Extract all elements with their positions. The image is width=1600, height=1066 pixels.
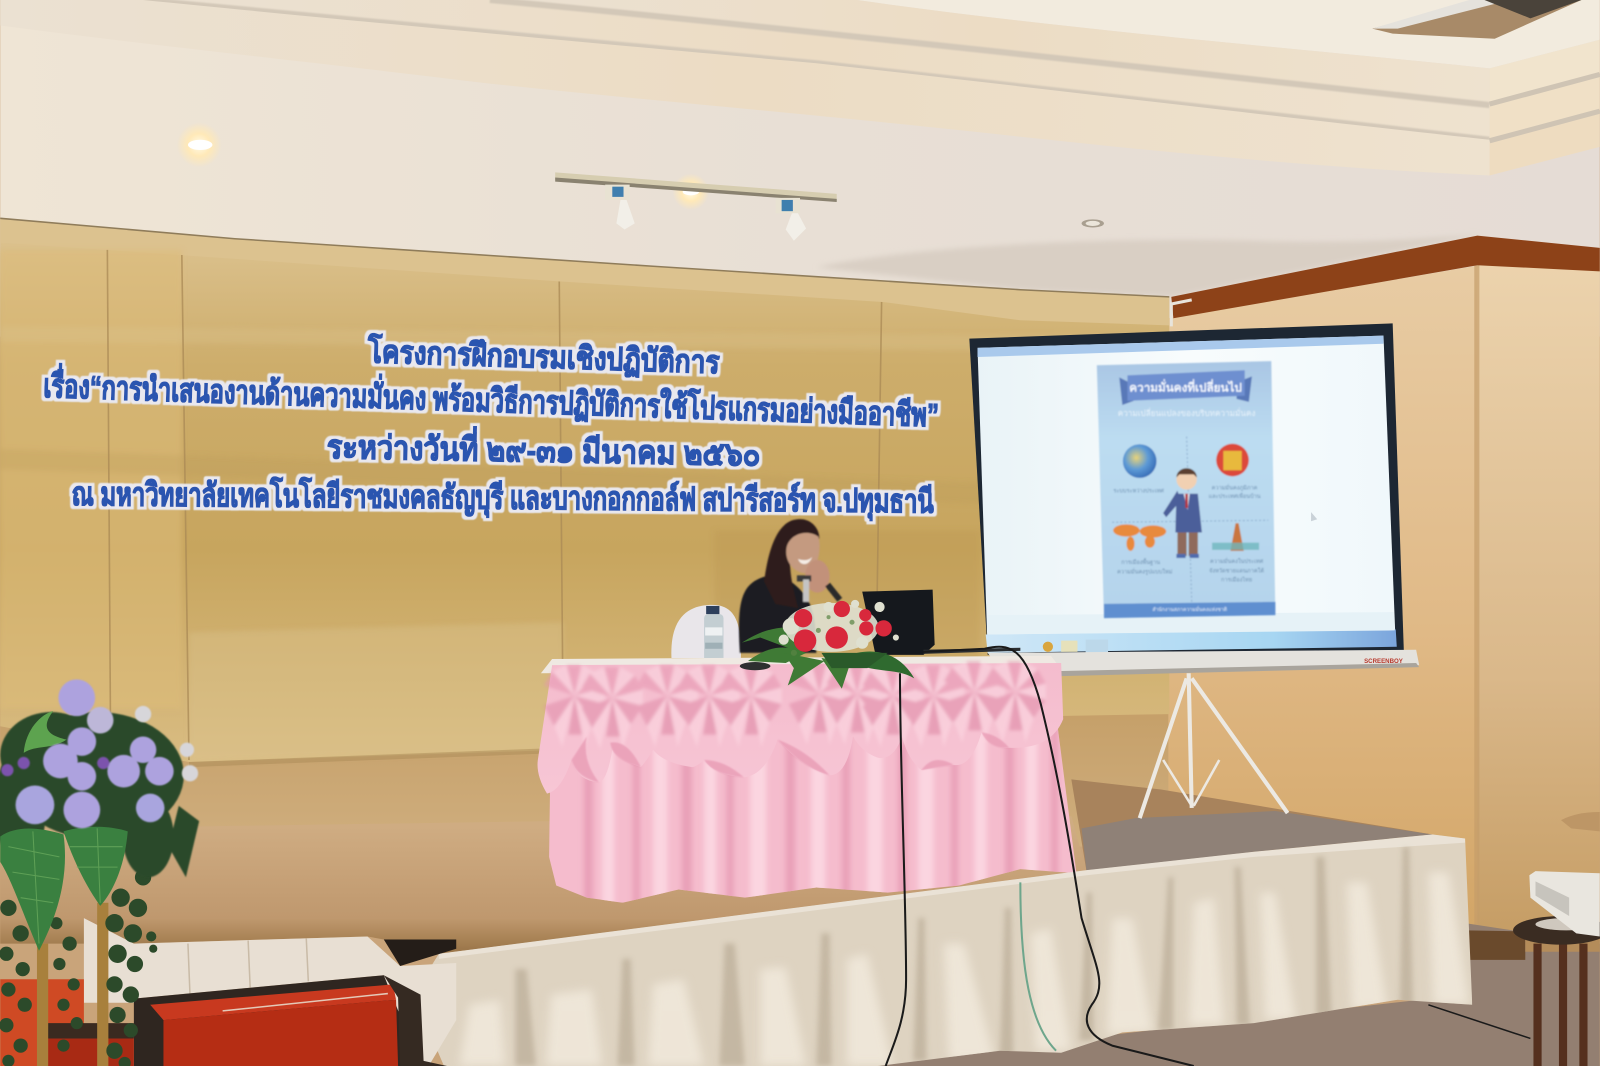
- projector body: [1529, 871, 1600, 936]
- projector on side table: [1513, 812, 1600, 1066]
- fern leaves: [0, 827, 128, 951]
- pleated skirt: [549, 729, 1076, 903]
- recessed upper ceiling: [857, 0, 1600, 68]
- slide infographic: ความมั่นคงในประเทศ: [1210, 557, 1264, 565]
- window title bar: [977, 336, 1383, 357]
- icon: world map: [1113, 524, 1166, 551]
- screen frame: [969, 323, 1404, 655]
- white filler: [779, 600, 899, 652]
- banner line 3: ระหว่างวันที่ ๒๙-๓๑ มีนาคม ๒๕๖๐: [327, 424, 761, 473]
- lower ceiling shadow: [816, 235, 1479, 297]
- slide infographic: [1097, 361, 1275, 618]
- right stage floor: [1071, 779, 1432, 872]
- projector screen: SCREENBOY: [1364, 658, 1403, 665]
- icon: globe: [1123, 444, 1157, 478]
- banner line 4: ณ มหาวิทยาลัยเทคโนโลยีราชมงคลธัญบุรี และบางกอกกอล์ฟ สปารีสอร์ท จ.ปทุมธานี: [72, 474, 934, 522]
- taskbar: [986, 629, 1397, 653]
- cables: [886, 647, 1530, 1066]
- slide infographic: จังหวัดชายแดนภาคใต้: [1209, 567, 1264, 574]
- banner line 2: เรื่อง“การนำเสนองานด้านความมั่นคง พร้อมวิธีการปฏิบัติการใช้โปรแกรมอย่างมืออาชีพ”: [43, 363, 939, 434]
- slide infographic: ความมั่นคงรูปแบบใหม่: [1117, 567, 1173, 575]
- lower wall: [0, 704, 1428, 847]
- gathered swags: [538, 661, 1063, 794]
- ceiling: [0, 0, 1600, 337]
- presenter: [739, 519, 840, 653]
- leaf highlight: [24, 711, 67, 753]
- slide title ribbon: ความมั่นคงที่เปลี่ยนไป: [1129, 379, 1242, 395]
- table legs: [1533, 944, 1588, 1066]
- hand and microphone: [805, 560, 830, 593]
- tripod stand: [1140, 673, 1288, 818]
- slide infographic: ระบบระหว่างประเทศ: [1113, 488, 1164, 495]
- ivy: [0, 869, 157, 1066]
- air vent: [1372, 0, 1581, 39]
- moulding step 3: [0, 0, 1490, 175]
- presenter character: [1163, 468, 1202, 558]
- stage skirting right: [408, 826, 1490, 1066]
- flower arrangement on table: [740, 600, 914, 689]
- table top: [1513, 916, 1600, 945]
- screen hook: [1171, 300, 1192, 326]
- table with pink cloth: [538, 656, 1082, 908]
- moulding step 1: [490, 0, 1490, 103]
- icon: Thailand landmark: [1212, 523, 1259, 551]
- hair: [764, 519, 819, 608]
- ceiling lights: [177, 122, 1104, 227]
- slide infographic: ความเปลี่ยนแปลงของบริบทความมั่นคง: [1118, 407, 1255, 418]
- slide infographic: สำนักงานสภาความมั่นคงแห่งชาติ: [1152, 606, 1227, 613]
- laptop: [862, 590, 1020, 655]
- shelf: [1561, 812, 1600, 831]
- right side mouldings: [1490, 40, 1600, 103]
- jacket: [739, 576, 816, 653]
- floral stand: [0, 679, 199, 1066]
- moulding step 2: [143, 0, 1490, 140]
- curtain valance: [0, 218, 1169, 325]
- slide title ribbon: [1119, 370, 1252, 405]
- banner text: [43, 332, 939, 522]
- skirting board: [1465, 930, 1525, 960]
- face: [786, 533, 820, 573]
- slide infographic: ความมั่นคงภูมิภาค: [1212, 484, 1258, 492]
- mouse: [740, 662, 770, 670]
- left stage floor: [0, 816, 1087, 954]
- screen case roller: [988, 650, 1419, 676]
- red carnations: [794, 601, 892, 652]
- banner line 1: โครงการฝึกอบรมเชิงปฏิบัติการ: [366, 332, 720, 380]
- cursor: [1311, 512, 1317, 521]
- stand poles: [37, 903, 108, 1066]
- slide infographic: การเมืองพื้นฐาน: [1121, 558, 1160, 566]
- track lights: [555, 172, 837, 241]
- curtain backdrop: [0, 218, 1169, 767]
- taskbar icons: [1043, 640, 1108, 653]
- red stairs: [0, 975, 447, 1066]
- stage skirting left: [84, 918, 456, 1066]
- projector screen: [969, 300, 1419, 818]
- greenery: [742, 627, 914, 689]
- carpet floor: [878, 923, 1600, 1066]
- chair: [671, 605, 741, 658]
- right wall and column: [1168, 236, 1600, 954]
- slide infographic: การเมืองไทย: [1221, 576, 1252, 583]
- purple hydrangeas: [1, 679, 198, 828]
- screen surface: [977, 336, 1396, 653]
- water bottle: [704, 606, 723, 665]
- slide infographic: และประเทศเพื่อนบ้าน: [1208, 492, 1261, 500]
- icon: ASEAN emblem: [1216, 444, 1249, 476]
- table top: [541, 656, 1061, 673]
- foliage mass: [0, 712, 199, 877]
